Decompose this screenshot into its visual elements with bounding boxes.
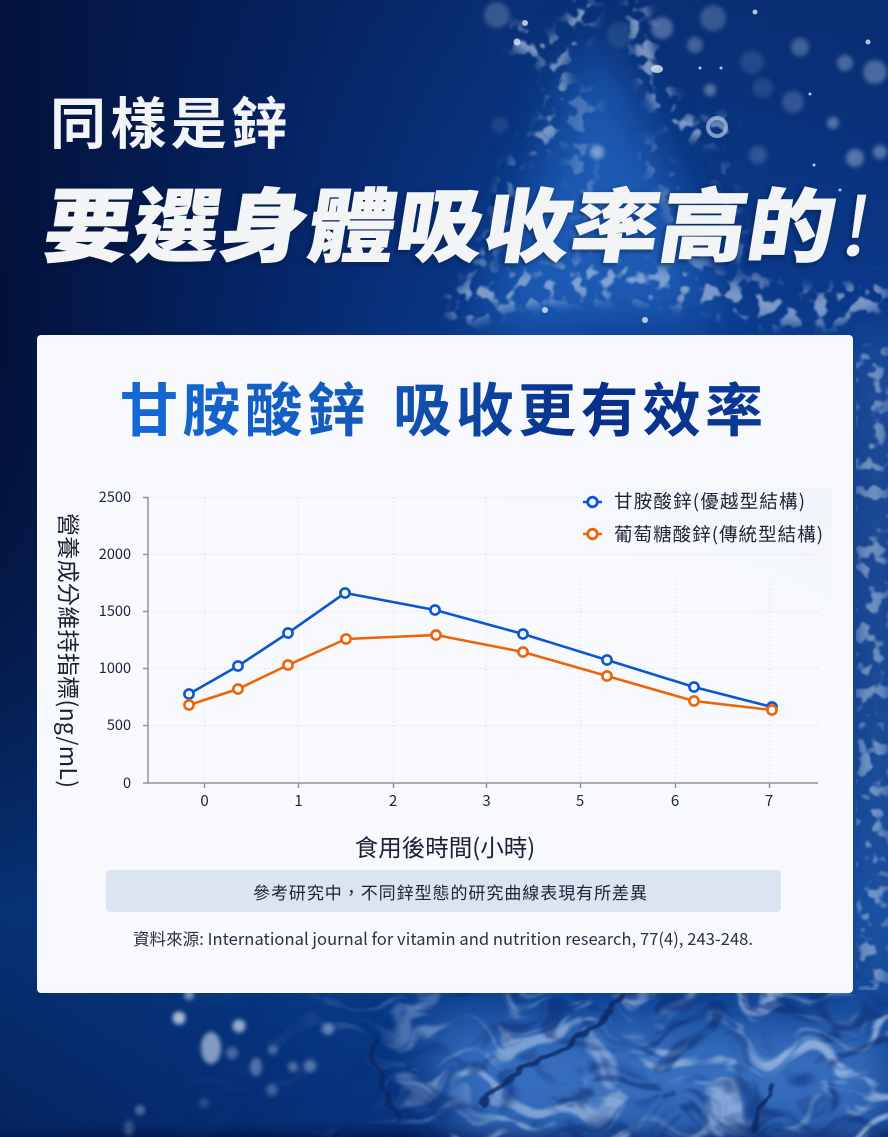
y axis tick labels: 2000 [99,543,131,564]
callout bar [106,870,781,912]
axes [143,497,818,788]
heading: 要選身體吸收率高的: 要選身體吸收率高的! [37,164,882,279]
x axis tick labels: 2 [389,790,397,811]
x axis tick labels: 5 [576,790,584,811]
x axis tick labels [200,790,773,811]
series: 甘胺酸鋅 [184,588,777,712]
panel: white chart card [37,335,853,993]
y axis tick labels: 1500 [99,600,131,621]
callout bar: 參考研究中，不同鋅型態的研究曲線表現有所差異 [253,879,647,904]
x axis tick labels: 0 [200,790,209,811]
series: 葡萄糖酸鋅 [184,630,777,715]
card title: 甘胺酸鋅 吸收更有效率 [120,364,768,448]
heading: 同樣是鋅: 同樣是鋅 [50,80,292,161]
y axis tick labels: 1000 [99,657,131,678]
legend: 葡萄糖酸鋅(傳統型結構) [614,521,823,547]
legend: 甘胺酸鋅(優越型結構) [614,488,805,514]
y axis title: 營養成分維持指標(ng/mL) [53,513,87,788]
y axis tick labels: 500 [107,714,131,735]
x axis tick labels: 6 [671,790,679,811]
y axis tick labels: 2500 [99,486,131,507]
source citation: 資料來源: International journal for vitamin and nutrition research, 77(4), 243-248. [133,926,753,950]
x axis tick labels: 7 [765,790,773,811]
y axis tick labels: 0 [123,772,131,793]
line chart [92,486,832,811]
x axis tick labels: 1 [294,790,303,811]
x axis tick labels: 3 [482,790,491,811]
legend [583,488,823,547]
x axis title: 食用後時間(小時) [355,829,535,863]
y axis tick labels [99,486,131,793]
